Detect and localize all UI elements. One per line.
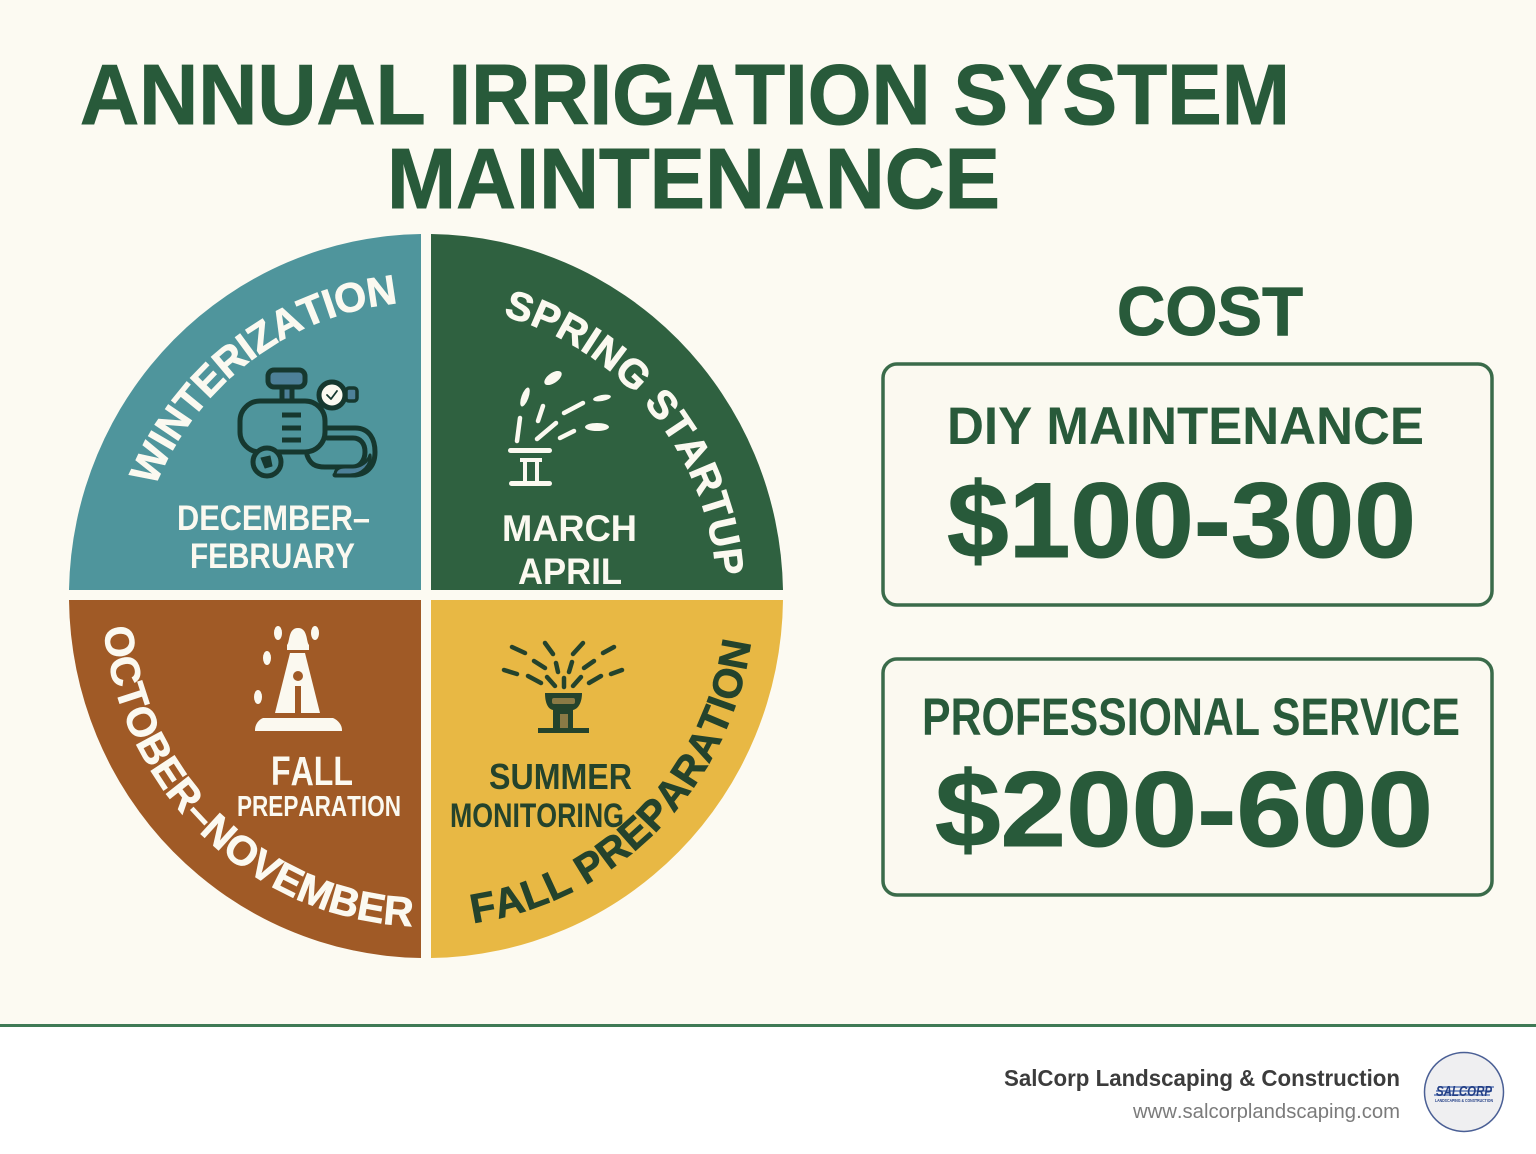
season label: summer monitoring bbox=[450, 756, 632, 835]
title: MAINTENANCE bbox=[387, 132, 1000, 227]
season label: fall preparation: PREPARATION bbox=[237, 791, 401, 823]
panel: professional service cost: $200-600 bbox=[935, 749, 1433, 869]
panel: summer quadrant bbox=[431, 600, 783, 958]
panel: professional service cost bbox=[883, 659, 1492, 895]
date label: march april: APRIL bbox=[518, 551, 622, 592]
date label: december-february: DECEMBER– bbox=[177, 499, 370, 538]
icon: air compressor bbox=[240, 370, 375, 476]
curved label: fall preparation: FALL PREPARATION bbox=[470, 639, 751, 924]
panel: diy maintenance cost: DIY MAINTENANCE bbox=[947, 397, 1424, 456]
date label: march april: MARCH bbox=[502, 508, 637, 549]
date label: march april bbox=[502, 508, 637, 592]
website: www.salcorplandscaping.com bbox=[1132, 1101, 1400, 1123]
panel: seasonal maintenance wheel bbox=[69, 234, 783, 958]
logo bbox=[1424, 1052, 1504, 1132]
date label: december-february bbox=[177, 499, 370, 576]
title bbox=[80, 48, 1290, 227]
icon: lighthouse sprinkler bbox=[254, 626, 342, 731]
date label: december-february: FEBRUARY bbox=[190, 537, 355, 576]
panel: spring startup quadrant bbox=[431, 234, 783, 592]
logo: LANDSCAPING & CONSTRUCTION bbox=[1435, 1098, 1493, 1103]
icon: summer sprinkler bbox=[504, 643, 622, 733]
season label: summer monitoring: SUMMER bbox=[489, 756, 632, 797]
curved label: october-november: OCTOBER–NOVEMBER bbox=[104, 627, 412, 927]
title: ANNUAL IRRIGATION SYSTEM bbox=[80, 48, 1290, 143]
company name: SalCorp Landscaping & Construction bbox=[1004, 1065, 1400, 1091]
panel: winterization quadrant bbox=[69, 234, 421, 590]
season label: fall preparation: FALL bbox=[271, 748, 353, 794]
icon: spring sprinkler bbox=[508, 368, 611, 486]
season label: summer monitoring: MONITORING bbox=[450, 797, 624, 835]
logo: SALCORP bbox=[1436, 1083, 1493, 1100]
panel: october-november quadrant bbox=[69, 600, 421, 958]
curved label: spring startup: SPRING STARTUP bbox=[506, 292, 743, 574]
season label: fall preparation bbox=[237, 748, 401, 823]
panel: diy maintenance cost: $100-300 bbox=[947, 460, 1416, 580]
panel: diy maintenance cost bbox=[883, 364, 1492, 605]
curved label: winterization: WINTERIZATION bbox=[128, 274, 396, 481]
heading: cost: COST bbox=[1117, 273, 1303, 350]
footer bbox=[0, 1024, 1536, 1154]
